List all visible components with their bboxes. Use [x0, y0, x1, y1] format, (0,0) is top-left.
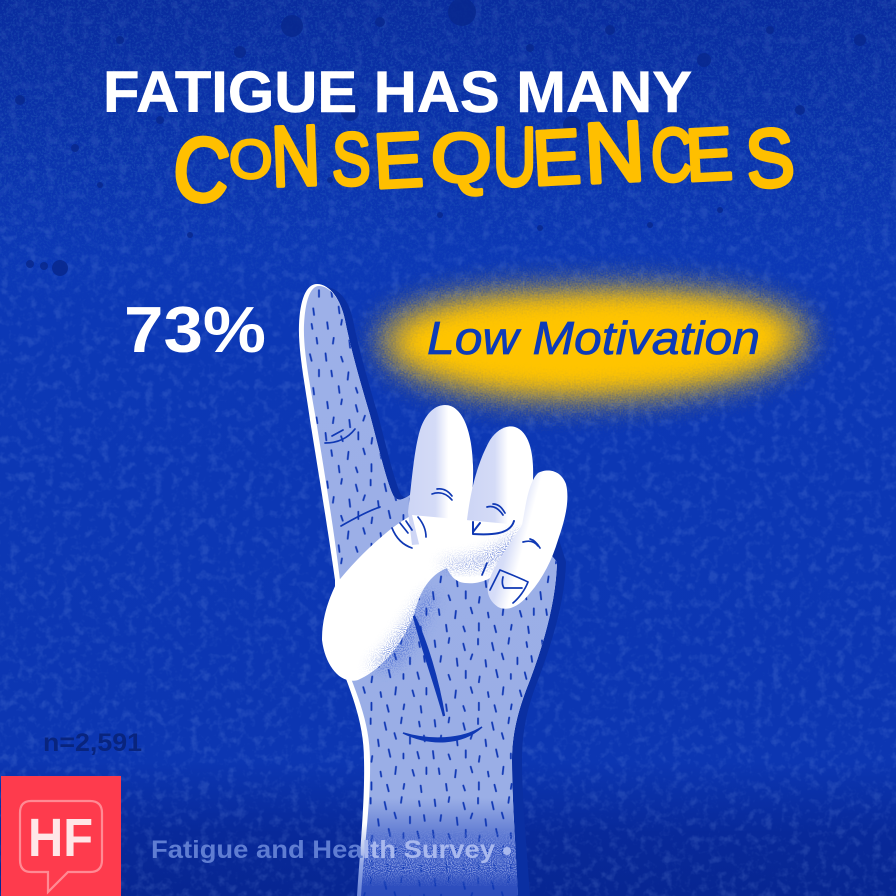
- arm speckle fade: [350, 838, 530, 878]
- wrist crease: [403, 727, 482, 742]
- title: consequences hand-lettered: U: [493, 111, 536, 203]
- highlight: yellow spray: [377, 283, 811, 405]
- title: consequences hand-lettered: Q: [431, 119, 492, 197]
- label: low motivation: Low Motivation: [427, 312, 760, 364]
- title: consequences hand-lettered: N: [582, 103, 647, 201]
- sample size: n=2,591: [43, 729, 142, 757]
- illustration: raised hand: [299, 284, 567, 896]
- little finger: [488, 470, 567, 609]
- logo: HF: [1, 776, 121, 896]
- survey credit end dot: [503, 847, 511, 855]
- title: consequences hand-lettered: O: [229, 128, 273, 190]
- palm line: [414, 616, 444, 716]
- title: consequences hand-lettered: C: [169, 117, 234, 222]
- logo speech bubble: [20, 801, 102, 892]
- creases and nail: [325, 429, 540, 603]
- thumb speckle shading: [368, 590, 436, 668]
- title: consequences hand-lettered: C: [651, 115, 692, 198]
- survey credit: Fatigue and Hea lth Survey: [151, 836, 495, 864]
- palm join: [412, 515, 522, 564]
- thumb: [322, 515, 524, 681]
- title: consequences hand-lettered: E: [530, 113, 583, 202]
- statistic: 73%: 73%: [124, 293, 266, 366]
- title: consequences hand-lettered: N: [270, 109, 322, 205]
- arm and index finger: [304, 286, 557, 896]
- skin hatching: [304, 286, 557, 896]
- title: consequences hand-lettered: E: [371, 117, 425, 205]
- finger speckle shading: [440, 532, 530, 569]
- hand shadow: [325, 287, 566, 896]
- title: consequences hand-lettered: S: [743, 112, 797, 206]
- title: consequences hand-lettered: E: [684, 113, 734, 197]
- title: consequences hand-lettered: [169, 103, 797, 222]
- arm and index finger rim: [299, 284, 557, 896]
- title: consequences hand-lettered: S: [332, 119, 371, 202]
- ring finger: [467, 426, 533, 548]
- title: fatigue has many: FATIGUE HAS MANY: [103, 60, 692, 125]
- logo letters: HF: [28, 808, 93, 868]
- middle finger: [408, 405, 473, 545]
